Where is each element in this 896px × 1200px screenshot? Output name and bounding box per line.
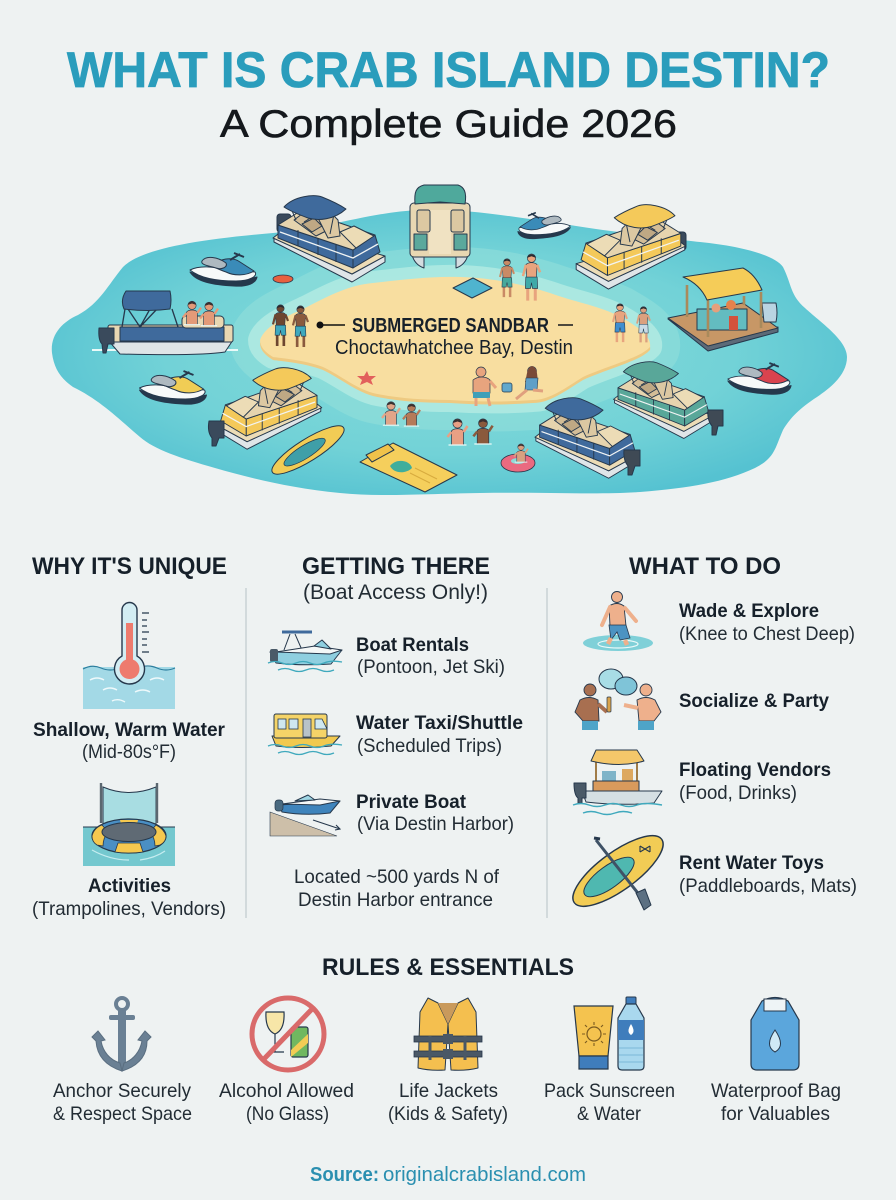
icon: sunscreen and water bottle bbox=[574, 997, 644, 1070]
callout label bbox=[316, 314, 573, 359]
heading: WHAT TO DO bbox=[629, 553, 781, 580]
text: anchor: Anchor Securely bbox=[53, 1080, 191, 1102]
text: dry bag: Waterproof Bag bbox=[711, 1080, 841, 1102]
people wading bbox=[382, 402, 535, 472]
text: shallow warm water: Shallow, Warm Water bbox=[33, 719, 225, 741]
people on the sandbar bbox=[273, 254, 650, 406]
icon: paddleboard bbox=[563, 824, 673, 918]
floating mat bbox=[360, 443, 457, 492]
text: life jackets bbox=[388, 1080, 508, 1125]
starfish bbox=[357, 371, 376, 385]
towel bbox=[453, 278, 492, 298]
text: boat rentals: Boat Rentals bbox=[356, 634, 469, 656]
title bbox=[67, 42, 830, 146]
heading: WHY IT'S UNIQUE bbox=[32, 553, 227, 580]
text: location note bbox=[294, 866, 500, 911]
icon: rental boat bbox=[268, 632, 342, 672]
icon: wading person bbox=[583, 592, 653, 651]
floating vendor deck bbox=[668, 268, 778, 351]
text: private boat bbox=[356, 791, 514, 835]
text: wade and explore bbox=[679, 600, 855, 645]
icon: private boat on ramp bbox=[270, 795, 340, 836]
text: life jackets: (Kids & Safety) bbox=[388, 1103, 508, 1125]
icon: anchor bbox=[92, 998, 151, 1071]
text: dry bag: for Valuables bbox=[721, 1103, 830, 1125]
title: A Complete Guide 2026 bbox=[220, 103, 677, 146]
pontoon: yellow top-right bbox=[576, 205, 686, 289]
text: dry bag bbox=[711, 1080, 841, 1125]
pontoon: yellow bottom-left bbox=[208, 368, 322, 449]
paddleboard bbox=[267, 418, 349, 482]
text: rent water toys bbox=[679, 852, 857, 897]
heading: (Boat Access Only!) bbox=[303, 581, 488, 604]
panel: rules and essentials bbox=[53, 954, 841, 1125]
text: alcohol bbox=[219, 1080, 354, 1125]
text: floating vendors: Floating Vendors bbox=[679, 759, 831, 781]
pontoon: green bottom-right bbox=[614, 362, 723, 438]
callout label: Choctawhatchee Bay, Destin bbox=[335, 336, 573, 359]
source line: Source: bbox=[310, 1164, 379, 1186]
text: rent water toys: Rent Water Toys bbox=[679, 852, 824, 874]
text: boat rentals bbox=[356, 634, 505, 678]
source line: originalcrabisland.com bbox=[383, 1164, 586, 1186]
icon: dry bag bbox=[751, 998, 799, 1070]
heading: GETTING THERE bbox=[302, 553, 490, 580]
text: floating vendors: (Food, Drinks) bbox=[679, 782, 797, 804]
text: rent water toys: (Paddleboards, Mats) bbox=[679, 875, 857, 897]
pontoon: blue left side view bbox=[92, 291, 238, 355]
frisbee bbox=[273, 275, 293, 283]
text: sunscreen bbox=[544, 1080, 675, 1125]
text: shallow warm water: (Mid-80s°F) bbox=[82, 741, 176, 763]
icon: floating vendor boat bbox=[573, 750, 662, 814]
icon: water trampoline bbox=[83, 783, 175, 866]
text: sunscreen: Pack Sunscreen bbox=[544, 1080, 675, 1102]
panel: why it's unique bbox=[32, 553, 227, 920]
text: water taxi bbox=[356, 712, 523, 757]
illustration: crab island sandbar map bbox=[52, 185, 847, 495]
text: location note: Located ~500 yards N of bbox=[294, 866, 500, 888]
text: shallow warm water bbox=[33, 719, 225, 763]
text: anchor: & Respect Space bbox=[53, 1103, 192, 1125]
heading: RULES & ESSENTIALS bbox=[322, 954, 574, 981]
icon: two people socializing bbox=[575, 669, 661, 730]
text: private boat: Private Boat bbox=[356, 791, 466, 813]
jet ski: red bbox=[728, 363, 791, 394]
text: alcohol: (No Glass) bbox=[246, 1103, 329, 1125]
text: sunscreen: & Water bbox=[577, 1103, 641, 1125]
text: activities: (Trampolines, Vendors) bbox=[32, 898, 226, 920]
icon: life jacket bbox=[414, 998, 482, 1070]
title: WHAT IS CRAB ISLAND DESTIN? bbox=[67, 42, 830, 98]
pontoon: blue top-left bbox=[273, 196, 385, 282]
jet ski: blue top bbox=[518, 213, 570, 239]
text: life jackets: Life Jackets bbox=[399, 1080, 498, 1102]
panel: what to do bbox=[563, 553, 857, 918]
icon: thermometer in water bbox=[83, 602, 175, 709]
text: wade and explore: Wade & Explore bbox=[679, 600, 819, 622]
pontoon: teal front view bbox=[410, 185, 470, 268]
text: floating vendors bbox=[679, 759, 831, 804]
seated woman bbox=[516, 366, 543, 399]
text: boat rentals: (Pontoon, Jet Ski) bbox=[357, 656, 505, 678]
jet ski: yellow bbox=[140, 371, 206, 404]
text: water taxi: Water Taxi/Shuttle bbox=[356, 712, 523, 734]
text: location note: Destin Harbor entrance bbox=[298, 889, 493, 911]
jet ski: blue bbox=[190, 253, 257, 286]
divider lines bbox=[246, 588, 547, 918]
icon: no glass bbox=[252, 998, 324, 1070]
icon: water taxi bbox=[268, 714, 342, 754]
seated man bbox=[473, 367, 496, 406]
text: water taxi: (Scheduled Trips) bbox=[357, 735, 502, 757]
heading bbox=[302, 553, 490, 604]
pontoon: blue bottom bbox=[535, 398, 640, 478]
water bbox=[52, 210, 847, 495]
text: private boat: (Via Destin Harbor) bbox=[357, 813, 514, 835]
text: activities bbox=[32, 875, 226, 920]
text: anchor bbox=[53, 1080, 192, 1125]
panel: getting there bbox=[268, 553, 523, 911]
text: wade and explore: (Knee to Chest Deep) bbox=[679, 623, 855, 645]
callout label: SUBMERGED SANDBAR bbox=[352, 314, 549, 337]
text: alcohol: Alcohol Allowed bbox=[219, 1080, 354, 1102]
sandbar bbox=[260, 277, 650, 404]
text: activities: Activities bbox=[88, 875, 171, 897]
text: socialize: Socialize & Party bbox=[679, 690, 829, 712]
